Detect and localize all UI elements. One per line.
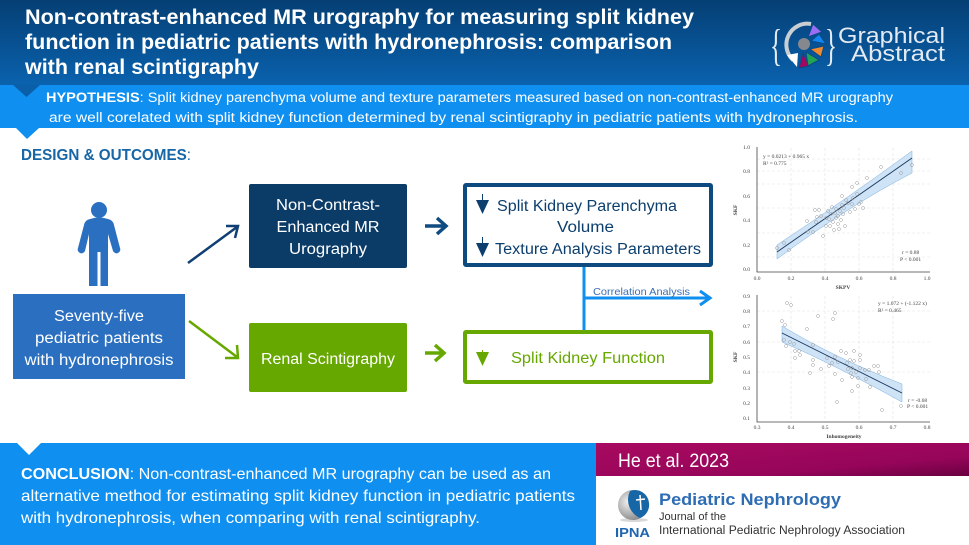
journal name: International Pediatric Nephrology Association [659,525,905,537]
chart: SKF versus inhomogeneity: 0.7 [743,324,750,330]
box: split kidney function: Split Kidney Function [511,350,665,367]
box: MR outcomes: Texture Analysis Parameters [495,241,701,258]
box: patients: with hydronephrosis [23,352,174,369]
chart: SKF versus SKPV: r = 0.88 [902,250,920,256]
journal name: Pediatric Nephrology [659,490,842,509]
box: MR outcomes [465,185,711,265]
box: patients [13,294,185,379]
chart: SKF versus SKPV: 0.8 [743,169,750,175]
chart: SKF versus inhomogeneity: y = 1.072 + (-1.122 x) [878,300,927,307]
chart: SKF versus inhomogeneity: 0.9 [743,294,750,300]
panel: hypothesis: are well corelated with split kidney function determined by renal scintigraphy in pediatric patients with hydronephrosis. [49,110,858,125]
journal logo: IPNA [615,490,651,540]
panel: hypothesis: HYPOTHESIS : Split kidney parenchyma volume and texture parameters measured based on non-contrast-enhanced MR urography [46,90,893,105]
box: MR outcomes: Volume [557,219,614,236]
chart: SKF versus SKPV: 1.0 [924,276,931,282]
chart: SKF versus inhomogeneity: 0.8 [924,425,931,431]
box: renal scintigraphy [249,323,407,392]
title: with renal scintigraphy [24,56,259,79]
chart: SKF versus SKPV: 0.4 [822,276,829,282]
chart: SKF versus SKPV: SKF [733,204,739,215]
arrow: patients to scintigraphy [189,321,238,358]
chart: SKF versus SKPV: R² = 0.775 [763,161,787,167]
chart: SKF versus inhomogeneity: 0.2 [743,401,750,407]
box: MR outcomes: Split Kidney Parenchyma [497,198,677,215]
panel: conclusion: with hydronephrosis, when comparing with renal scintigraphy. [20,510,480,527]
citation banner [596,443,969,476]
graphical abstract logo: Abstract [851,41,945,66]
chart: SKF versus inhomogeneity: 0.6 [856,425,863,431]
graphical abstract logo [770,21,945,70]
connector: correlation analysis [584,267,710,331]
chart: SKF versus inhomogeneity: 0.5 [743,355,750,361]
box: patients: Seventy-five [54,308,144,325]
chart: SKF versus inhomogeneity: P < 0.001 [907,404,928,410]
connector: correlation analysis: Correlation Analysis [593,286,690,298]
chart: SKF versus SKPV: y = 0.0213 + 0.965 x [763,154,809,160]
journal name: Journal of the [659,511,726,523]
chart: SKF versus inhomogeneity: SKF [733,351,739,362]
chart: SKF versus SKPV [733,145,931,291]
chart: SKF versus SKPV: 0.0 [743,267,750,273]
graphical abstract logo: Graphical [838,23,945,48]
chart: SKF versus SKPV: SKPV [836,285,850,291]
chart: SKF versus SKPV: 1.0 [743,145,750,151]
chart: SKF versus inhomogeneity: 0.8 [743,309,750,315]
citation banner: He et al. 2023 [618,451,729,472]
chart: SKF versus inhomogeneity: R² = 0.465 [878,308,902,314]
panel: conclusion [0,443,596,545]
panel: hypothesis [0,85,969,139]
journal name [659,490,905,537]
title: Non-contrast-enhanced MR urography for measuring split kidney [25,6,694,29]
box: split kidney function [465,332,711,382]
box: patients: pediatric patients [35,330,163,347]
arrow: scintigraphy to outcome [425,345,444,361]
graphical abstract logo: { [770,21,782,70]
panel: conclusion: alternative method for estimating split kidney function in pediatric patients [21,488,575,505]
chart: SKF versus SKPV: 0.6 [856,276,863,282]
graphical abstract logo: } [825,21,837,70]
chart: SKF versus SKPV: 0.2 [743,243,750,249]
chart: SKF versus inhomogeneity: 0.3 [754,425,761,431]
chart: SKF versus inhomogeneity: 0.1 [743,416,750,422]
title: function in pediatric patients with hydronephrosis: comparison [25,31,672,54]
icon: person [78,202,120,286]
arrow: MR urography to outcome [425,218,446,234]
chart: SKF versus SKPV: 0.0 [754,276,761,282]
chart: SKF versus inhomogeneity: 0.3 [743,386,750,392]
chart: SKF versus inhomogeneity: 0.4 [788,425,795,431]
box: non-contrast-enhanced MR urography: Urography [289,241,367,258]
chart: SKF versus inhomogeneity: 0.5 [822,425,829,431]
header banner [0,0,969,85]
arrow: patients to MR urography [188,226,238,263]
chart: SKF versus inhomogeneity: 0.6 [743,340,750,346]
box: non-contrast-enhanced MR urography: Enhanced MR [276,219,380,236]
panel: conclusion: CONCLUSION: Non-contrast-enhanced MR urography can be used as an [21,466,551,483]
chart: SKF versus SKPV: 0.6 [743,194,750,200]
box: renal scintigraphy: Renal Scintigraphy [261,351,395,368]
chart: SKF versus inhomogeneity: Inhomogeneity [826,434,862,440]
chart: SKF versus SKPV: P < 0.001 [900,257,921,263]
title [24,6,694,79]
heading: design and outcomes: DESIGN & OUTCOMES: [21,147,191,164]
chart: SKF versus inhomogeneity: r = -0.68 [908,398,927,404]
box: non-contrast-enhanced MR urography: Non-Contrast- [276,197,380,214]
chart: SKF versus inhomogeneity: 0.7 [890,425,897,431]
chart: SKF versus SKPV: 0.2 [788,276,795,282]
journal logo: IPNA: IPNA [615,525,651,540]
box: non-contrast-enhanced MR urography [249,184,407,268]
chart: SKF versus SKPV: 0.4 [743,218,750,224]
chart: SKF versus inhomogeneity [733,294,931,440]
chart: SKF versus inhomogeneity: 0.4 [743,370,750,376]
chart: SKF versus SKPV: 0.8 [890,276,897,282]
